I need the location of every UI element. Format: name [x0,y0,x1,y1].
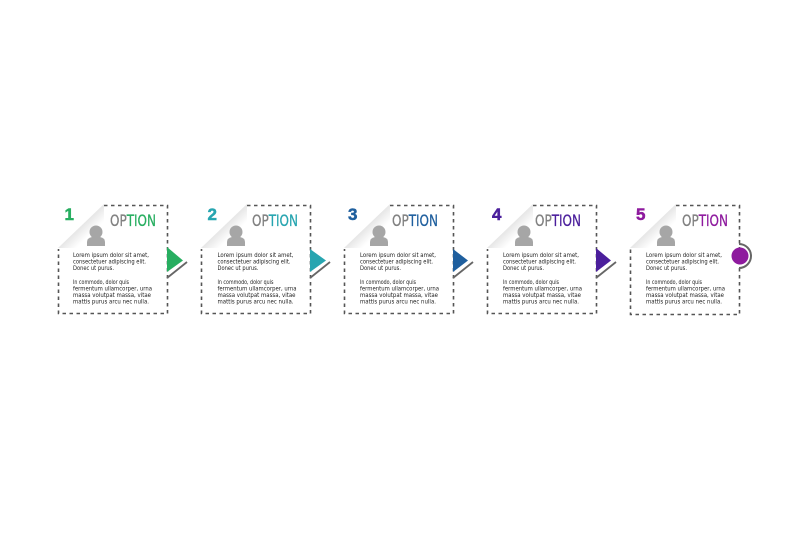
heading: OPTION [252,211,298,230]
body text: fermentum ullamcorper, urna [218,286,297,292]
dashed card border [630,206,740,314]
body text: Lorem ipsum dolor sit amet, [73,253,149,259]
body text: mattis purus arcu nec nulla. [73,300,149,306]
body text: massa volutpat massa, vitae [503,293,581,299]
icon: person [370,226,388,246]
panel: option 5 [630,204,751,314]
body text: consectetuer adipiscing elit. [73,260,146,266]
step number 1: 1 [64,205,74,224]
body text: massa volutpat massa, vitae [360,293,438,299]
dashed card border [344,206,454,314]
folded corner [58,204,104,248]
body text [360,253,439,306]
body text: In commodo, dolor quis [218,280,274,286]
arrow [596,248,616,278]
body text: Lorem ipsum dolor sit amet, [218,253,294,259]
body text: mattis purus arcu nec nulla. [646,300,722,306]
step number 5: 5 [636,205,645,224]
icon: person [87,226,105,246]
body text: In commodo, dolor quis [646,280,702,286]
icon: person [227,226,245,246]
end marker [732,244,751,268]
body text [218,253,297,306]
dashed card border [202,206,310,314]
body text: fermentum ullamcorper, urna [646,286,725,292]
arrow [453,249,473,278]
body text: mattis purus arcu nec nulla. [218,300,294,306]
body text: Donec ut purus. [503,266,544,272]
body text: fermentum ullamcorper, urna [360,286,439,292]
body text: massa volutpat massa, vitae [73,293,151,299]
panel: option 1 [58,204,187,314]
body text: Donec ut purus. [646,266,687,272]
heading: OPTION [682,211,728,230]
heading: OPTION [535,211,581,230]
body text: Donec ut purus. [73,266,114,272]
step number 4: 4 [492,205,502,224]
arrow [310,249,330,278]
body text: consectetuer adipiscing elit. [646,260,719,266]
body text [73,253,152,306]
panel: option 3 [344,204,473,314]
icon: person [657,226,675,246]
panel: option 4 [487,204,616,314]
body text: consectetuer adipiscing elit. [503,260,576,266]
dashed card border [488,206,596,314]
body text: massa volutpat massa, vitae [218,293,296,299]
body text: In commodo, dolor quis [73,280,129,286]
icon: person [515,226,533,246]
body text: fermentum ullamcorper, urna [503,286,582,292]
step number 2: 2 [208,205,217,224]
body text: Donec ut purus. [218,266,259,272]
body text: Lorem ipsum dolor sit amet, [360,253,436,259]
folded corner [630,204,676,248]
body text: consectetuer adipiscing elit. [218,260,291,266]
body text: Lorem ipsum dolor sit amet, [646,253,722,259]
dashed card border [58,206,168,314]
body text: mattis purus arcu nec nulla. [503,300,579,306]
body text [503,253,582,306]
body text [646,253,725,306]
body text: massa volutpat massa, vitae [646,293,724,299]
body text: Lorem ipsum dolor sit amet, [503,253,579,259]
folded corner [487,204,533,248]
arrow [167,247,187,278]
panel: option 2 [201,204,330,314]
body text: Donec ut purus. [360,266,401,272]
heading: OPTION [110,211,156,230]
body text: In commodo, dolor quis [503,280,559,286]
body text: mattis purus arcu nec nulla. [360,300,436,306]
body text: In commodo, dolor quis [360,280,416,286]
folded corner [344,204,390,248]
folded corner [201,204,247,248]
step number 3: 3 [348,205,357,224]
body text: fermentum ullamcorper, urna [73,286,152,292]
body text: consectetuer adipiscing elit. [360,260,433,266]
heading: OPTION [392,211,438,230]
